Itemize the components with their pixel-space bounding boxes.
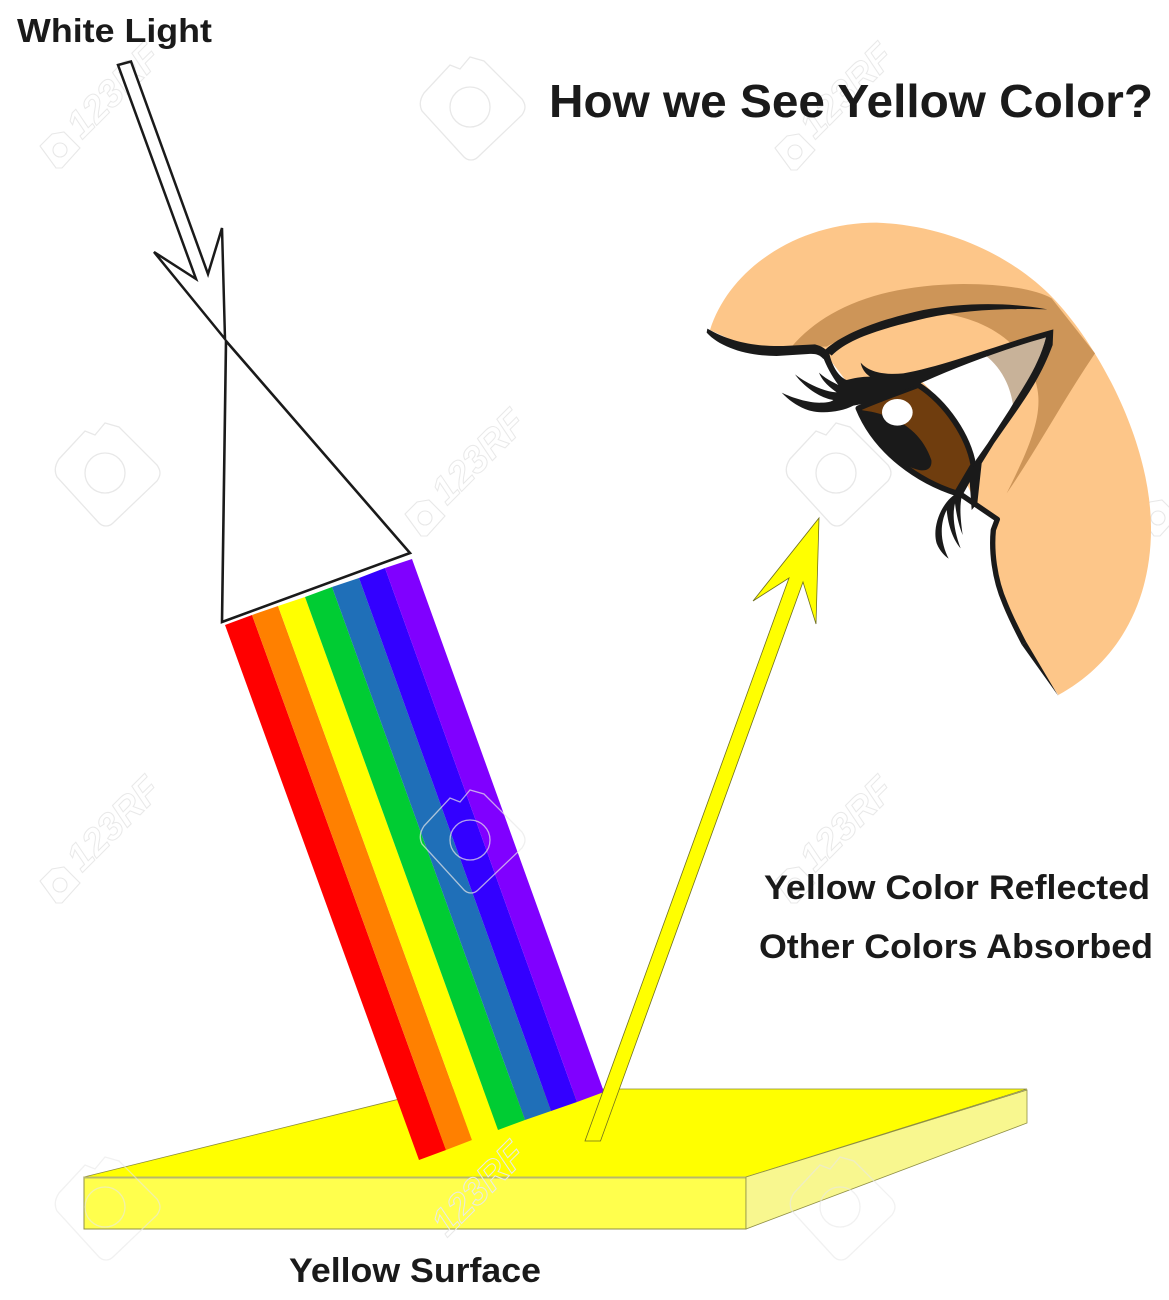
- text: 123RF: [424, 401, 535, 512]
- arrow: reflected yellow light: [585, 518, 819, 1141]
- text: 123RF: [59, 768, 170, 879]
- brow shadow: [792, 284, 1095, 493]
- pupil: [860, 410, 931, 470]
- surface: yellow slab: [84, 1089, 1027, 1229]
- text: 123RF: [59, 35, 170, 146]
- arrow: incoming white light: [118, 62, 225, 339]
- eyeball: [920, 335, 1048, 467]
- label: yellow surface: Yellow Surface: [289, 1252, 541, 1290]
- iris: [858, 385, 973, 493]
- crease line: [825, 304, 1047, 356]
- text: 123RF: [424, 1133, 535, 1244]
- text: 123RF: [792, 768, 903, 879]
- corner shadow: [985, 337, 1046, 407]
- prism: [222, 341, 410, 622]
- text: 123RF: [792, 35, 903, 146]
- rainbow light spectrum bands: [225, 559, 604, 1160]
- label: yellow color reflected: Yellow Color Reflected: [764, 869, 1150, 907]
- lower lid and cheek line: [962, 495, 1058, 696]
- upper lid and lashes: [782, 329, 1053, 510]
- highlight: [882, 399, 913, 426]
- icon: eye: [707, 223, 1151, 696]
- skin: [710, 223, 1151, 695]
- label: white light: White Light: [17, 12, 212, 49]
- brow line: [707, 329, 829, 359]
- lower lashes: [935, 463, 980, 559]
- label: other colors absorbed: Other Colors Absorbed: [759, 928, 1153, 966]
- title: How we See Yellow Color?: [549, 75, 1153, 127]
